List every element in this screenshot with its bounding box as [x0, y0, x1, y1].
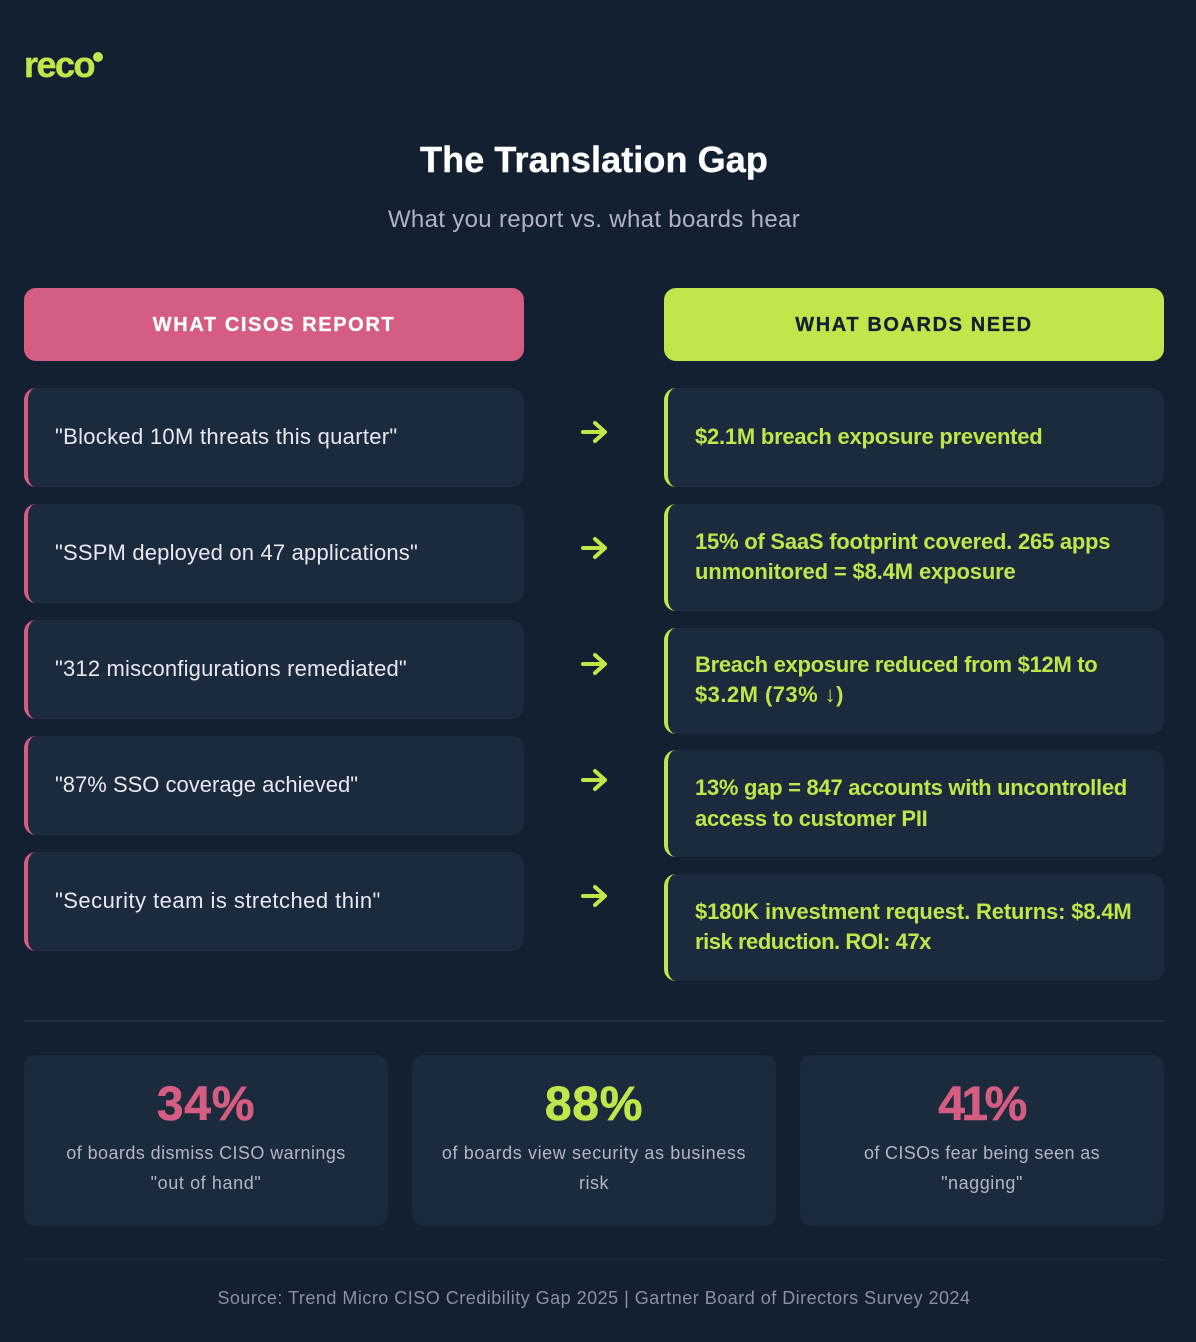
- need card 2: 15% of SaaS footprint covered. 265 apps: [695, 528, 1110, 554]
- report card 2: [24, 504, 524, 603]
- report card 5: [24, 852, 524, 951]
- logo: reco: reco: [24, 44, 94, 85]
- stat card: 88%: 88%: [545, 1078, 643, 1131]
- heading: what CISOs report: WHAT CISOS REPORT: [153, 314, 395, 336]
- need card 5: [664, 874, 1164, 981]
- stat card: 41%: of CISOs fear being seen as: [864, 1143, 1100, 1163]
- need card 2: [664, 504, 1164, 611]
- arrow 2: [581, 536, 608, 560]
- need card 4: 13% gap = 847 accounts with uncontrolled: [695, 774, 1127, 800]
- stat card: 88%: risk: [579, 1173, 609, 1193]
- stat card: 34%: [24, 1055, 388, 1226]
- need card 3: [664, 628, 1164, 734]
- stat card: 34%: "out of hand": [151, 1173, 261, 1193]
- need card 3: $3.2M (73% ↓): [695, 682, 844, 707]
- heading: what CISOs report: [24, 288, 524, 361]
- report card 3: "312 misconfigurations remediated": [55, 656, 407, 680]
- report card 4: "87% SSO coverage achieved": [55, 772, 358, 796]
- stat card: 41%: 41%: [938, 1078, 1024, 1131]
- subtitle: What you report vs. what boards hear: [388, 206, 800, 233]
- need card 1: [664, 388, 1164, 487]
- arrow 4: [581, 768, 608, 792]
- need card 5: $180K investment request. Returns: $8.4M: [695, 898, 1132, 924]
- stat card: 88%: of boards view security as business: [442, 1143, 746, 1163]
- source footer: Source: Trend Micro CISO Credibility Gap 2025 | Gartner Board of Directors Survey 2024: [217, 1288, 971, 1308]
- arrow 5: [581, 884, 608, 908]
- report card 1: [24, 388, 524, 487]
- report card 2: "SSPM deployed on 47 applications": [55, 540, 418, 564]
- title: The Translation Gap: [420, 139, 768, 180]
- need card 4: [664, 750, 1164, 857]
- report card 3: [24, 620, 524, 719]
- stat card: 41%: "nagging": [941, 1173, 1023, 1193]
- heading: what boards need: WHAT BOARDS NEED: [795, 314, 1033, 336]
- need card 1: $2.1M breach exposure prevented: [695, 424, 1042, 448]
- arrow 1: [581, 420, 608, 444]
- need card 2: unmonitored = $8.4M exposure: [695, 558, 1016, 584]
- need card 4: access to customer PII: [695, 806, 928, 830]
- arrow 3: [581, 652, 608, 676]
- report card 5: "Security team is stretched thin": [55, 888, 381, 912]
- need card 3: Breach exposure reduced from $12M to: [695, 652, 1097, 677]
- stat card: 34%: 34%: [157, 1078, 255, 1131]
- need card 5: risk reduction. ROI: 47x: [695, 928, 931, 954]
- heading: what boards need: [664, 288, 1164, 361]
- report card 4: [24, 736, 524, 835]
- report card 1: "Blocked 10M threats this quarter": [55, 424, 398, 448]
- stat card: 41%: [800, 1055, 1164, 1226]
- stat card: 88%: [412, 1055, 776, 1226]
- stat card: 34%: of boards dismiss CISO warnings: [66, 1143, 346, 1163]
